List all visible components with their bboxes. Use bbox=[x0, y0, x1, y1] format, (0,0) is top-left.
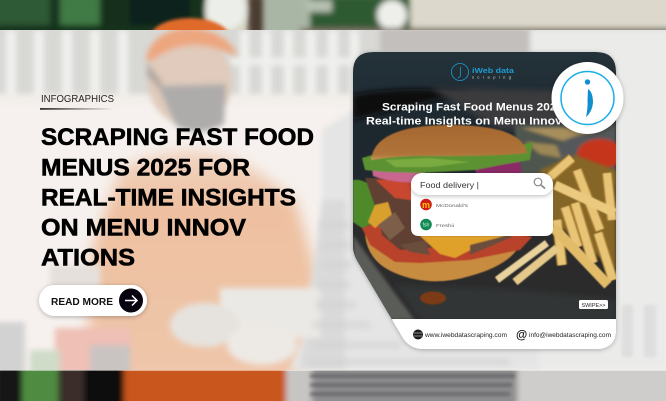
icon: Freshii bbox=[420, 219, 432, 230]
lower bun bbox=[353, 125, 533, 281]
icon: McDonald's: m bbox=[422, 200, 430, 210]
fries bbox=[540, 155, 616, 270]
burger photo bbox=[353, 52, 623, 350]
icon: arrow bbox=[119, 288, 143, 312]
title: ON MENU INNOV bbox=[41, 214, 246, 242]
shirt bbox=[290, 80, 540, 370]
sauce bbox=[362, 222, 532, 263]
website contact bbox=[413, 330, 507, 340]
tomato and onion bbox=[376, 179, 412, 201]
head bbox=[148, 38, 232, 126]
email contact bbox=[516, 330, 611, 342]
email contact: info@iwebdatascraping.com bbox=[529, 333, 611, 339]
swipe tag: SWIPE>> bbox=[582, 303, 606, 309]
card headline: Scraping Fast Food Menus 2025 bbox=[382, 102, 563, 114]
title bbox=[41, 124, 314, 272]
circular brand logo bbox=[552, 62, 624, 134]
website contact: www.iwebdatascraping.com bbox=[424, 333, 507, 339]
lettuce bbox=[362, 142, 533, 173]
category label bbox=[40, 93, 114, 110]
background photo: bottom strip bbox=[0, 370, 666, 401]
patties bbox=[365, 178, 525, 250]
read more button: READ MORE bbox=[51, 297, 113, 308]
footer strip bbox=[392, 319, 616, 349]
card headline: Real-time Insights on Menu Innov bbox=[366, 116, 562, 128]
swipe tag bbox=[579, 300, 608, 309]
background photo: top strip bbox=[0, 0, 666, 30]
icon: search bbox=[534, 178, 545, 188]
title: SCRAPING FAST FOOD bbox=[41, 124, 314, 151]
search dropdown: McDonald's bbox=[436, 203, 469, 209]
search dropdown: Freshii bbox=[436, 223, 454, 229]
box and gloves bbox=[220, 288, 320, 338]
title: MENUS 2025 FOR bbox=[41, 154, 250, 182]
search dropdown: Food delivery | bbox=[420, 180, 479, 190]
icon: McDonald's bbox=[420, 199, 432, 210]
bike bbox=[55, 328, 130, 378]
read more button bbox=[39, 285, 147, 316]
card logo bbox=[452, 64, 515, 80]
panel: social post card bbox=[353, 52, 623, 350]
card headline bbox=[366, 102, 563, 128]
top bun bbox=[371, 125, 527, 160]
card logo: scraping bbox=[472, 74, 512, 80]
title: ATIONS bbox=[41, 244, 135, 272]
category label: INFOGRAPHICS bbox=[41, 93, 114, 105]
torso bbox=[85, 150, 318, 380]
search dropdown bbox=[411, 173, 553, 236]
icon: Freshii: fsh bbox=[423, 222, 430, 228]
card logo: iWeb data bbox=[472, 66, 515, 75]
blurred rear fries and ketchup bbox=[515, 125, 623, 185]
title: REAL-TIME INSIGHTS bbox=[41, 184, 296, 212]
slate board bbox=[353, 224, 392, 320]
email contact: @ bbox=[516, 330, 527, 342]
